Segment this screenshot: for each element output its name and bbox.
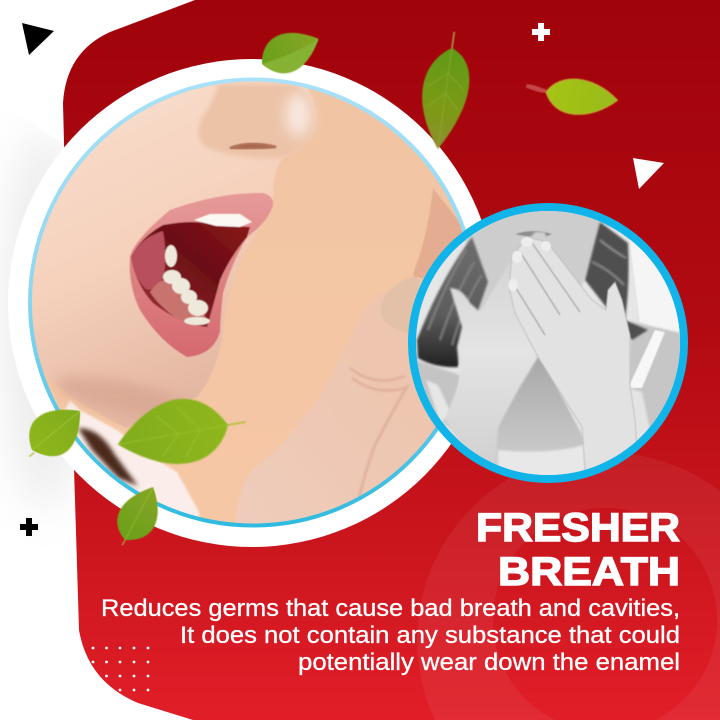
heading: Fresher Breath: BREATH [498, 550, 680, 594]
neck shadow [78, 428, 138, 486]
jaw shading [56, 374, 176, 416]
text block: description: Reduces germs that cause bad breath and cavities, [101, 595, 680, 622]
finger lines [514, 240, 580, 335]
upper teeth [194, 214, 252, 227]
panel: small circular greyscale photo covering mouth [410, 205, 690, 485]
hair left [417, 237, 488, 367]
lace [498, 445, 585, 476]
icon: black plus [20, 518, 38, 536]
wall [416, 211, 680, 475]
leaf: left edge [14, 394, 95, 472]
leaf: large bottom [112, 388, 251, 475]
face [20, 70, 316, 428]
leaf: top near circle [254, 21, 327, 82]
icon: white triangle [633, 158, 664, 189]
nose [198, 84, 316, 158]
icon: black triangle [22, 23, 54, 55]
lower teeth [163, 245, 210, 325]
right hand [509, 237, 638, 470]
mouth [130, 193, 273, 357]
fingernails [508, 237, 551, 291]
chest [484, 356, 597, 470]
gum [150, 280, 208, 323]
face [465, 211, 600, 310]
heading: Fresher Breath [476, 506, 680, 594]
leaf: lower [106, 478, 170, 554]
text block: description [101, 595, 680, 676]
shirt [64, 400, 200, 517]
tongue [131, 231, 166, 290]
hand with thumb [234, 277, 440, 530]
text block: description: It does not contain any substance that could [180, 622, 680, 649]
left hand [445, 232, 552, 470]
bra strap [628, 330, 665, 388]
nose shadow [515, 231, 552, 237]
hair right [585, 222, 648, 340]
leaf: lime right [524, 75, 619, 118]
dot pattern [92, 647, 149, 691]
heading: Fresher Breath: FRESHER [476, 506, 680, 550]
leaf: tall centre [415, 29, 476, 152]
panel: large circular photo of open mouth [8, 59, 496, 547]
upper finger [413, 188, 462, 278]
shoulders [630, 322, 680, 432]
text block: description: potentially wear down the enamel [298, 649, 680, 676]
white background with soft shadow [0, 144, 73, 496]
icon: white plus [532, 23, 550, 41]
